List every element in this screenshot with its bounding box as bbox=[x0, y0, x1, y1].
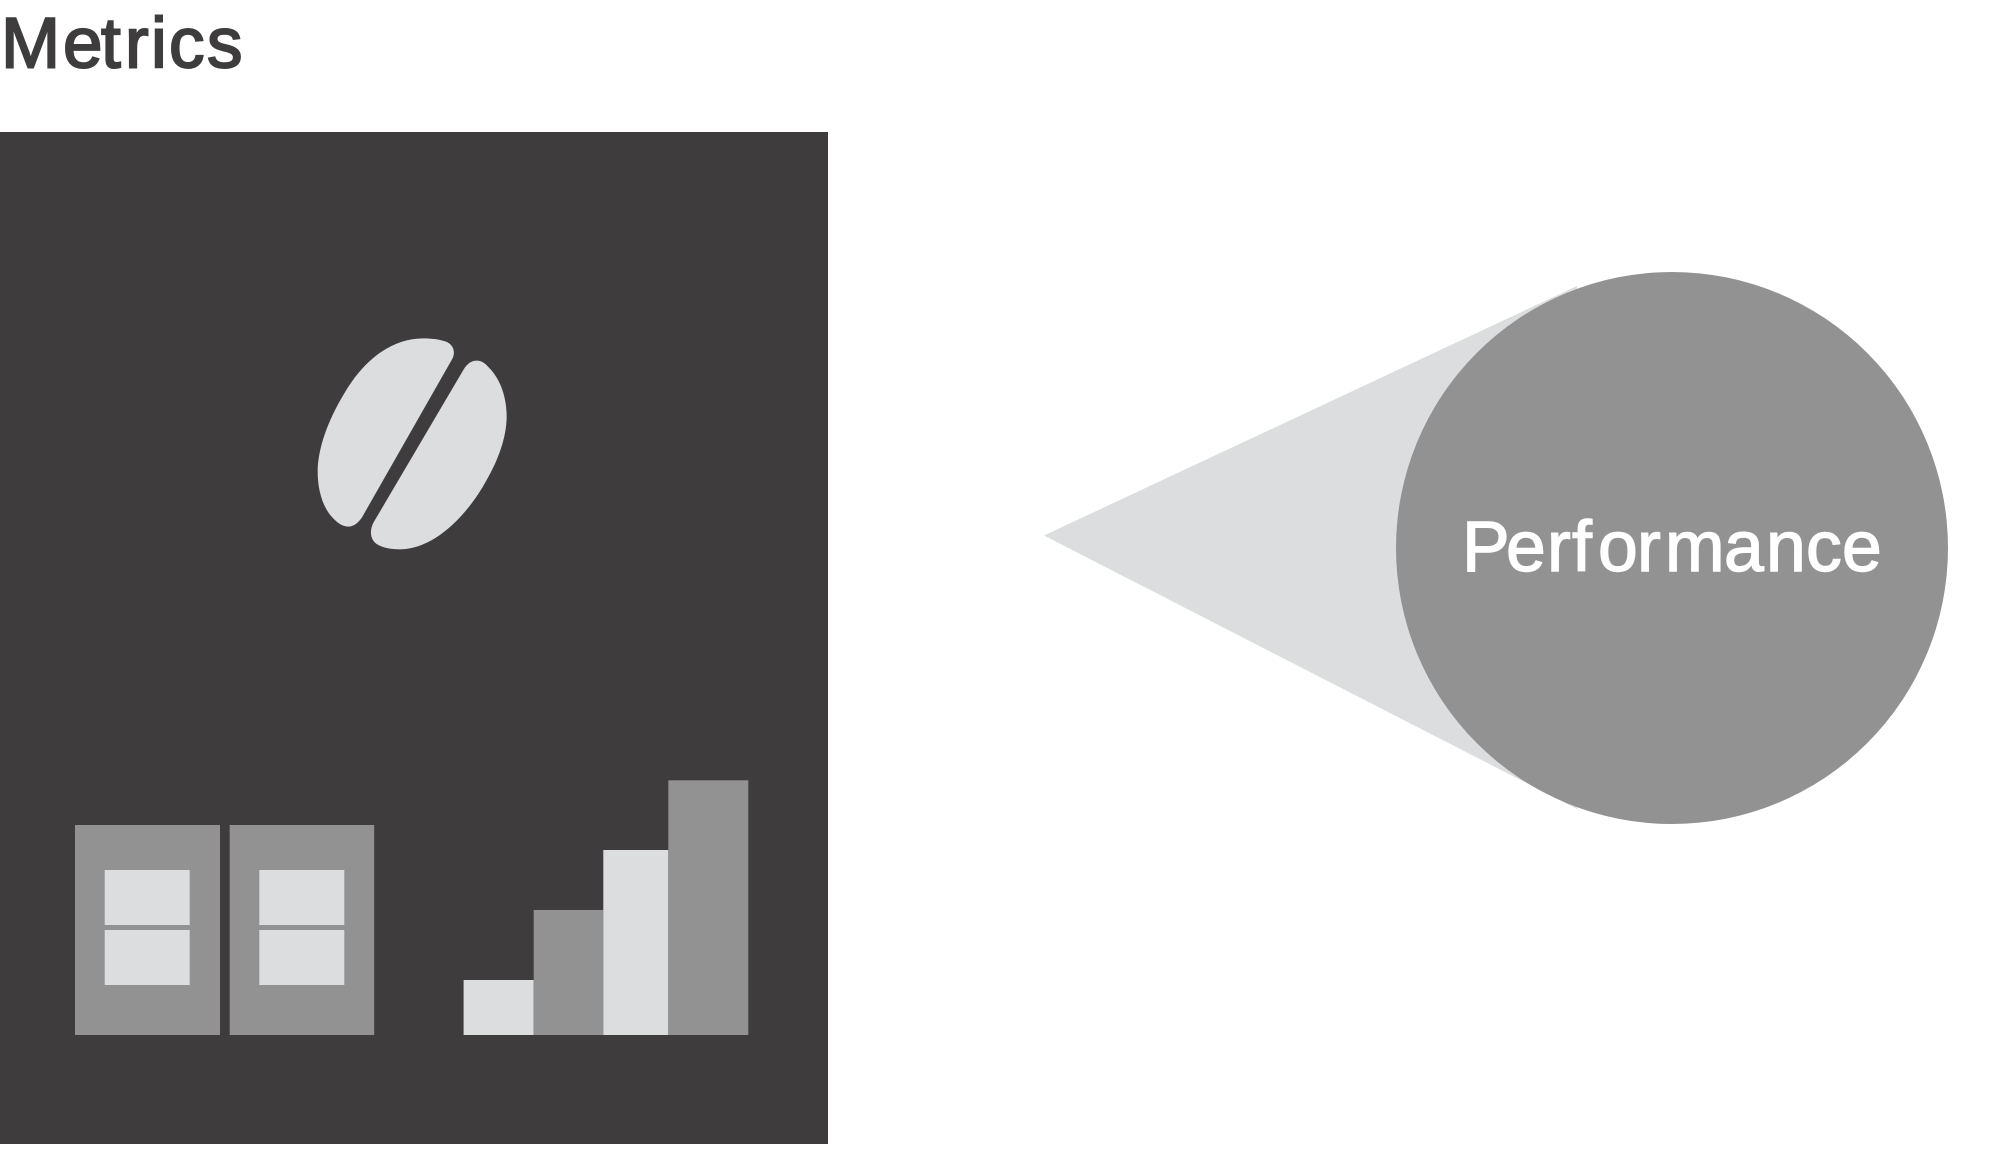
circle bbox=[1396, 272, 1948, 824]
circle label: Performance bbox=[1462, 507, 1882, 587]
bar chart bbox=[464, 780, 748, 1035]
card: left bbox=[75, 825, 220, 1035]
icon: two cards bbox=[75, 825, 374, 1035]
card: right bbox=[230, 825, 374, 1035]
icon: coffee bean bbox=[318, 338, 507, 549]
title: Metrics bbox=[1, 5, 242, 84]
cone bbox=[1044, 286, 1577, 809]
callout: performance cone and circle bbox=[1044, 272, 1948, 824]
panel: metrics dark background bbox=[0, 132, 828, 1144]
